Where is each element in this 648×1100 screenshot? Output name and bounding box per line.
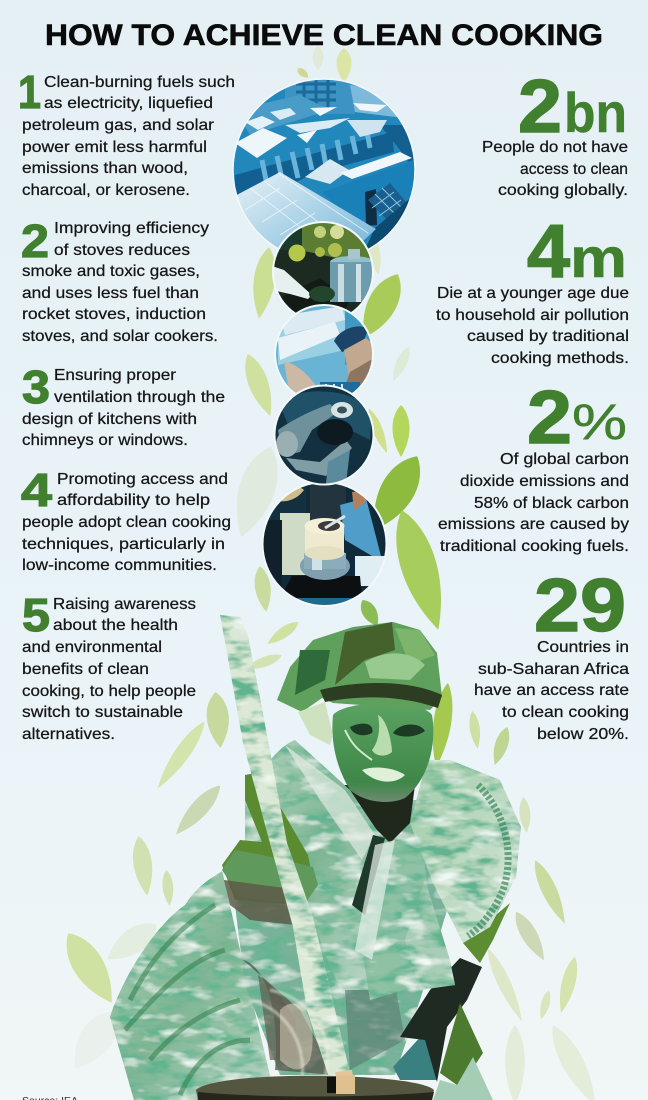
title: HOW TO ACHIEVE CLEAN COOKING	[45, 19, 603, 52]
woman: skirt and lap	[110, 800, 450, 1100]
step 3	[22, 361, 225, 449]
stat: 29: Countries in	[537, 639, 629, 656]
stat: 4m: caused by traditional	[467, 328, 629, 345]
stat: 29: have an access rate	[474, 682, 629, 699]
woman: wooden stirring stick	[220, 615, 354, 1093]
stat: 29	[474, 563, 629, 743]
step 4: people adopt clean cooking	[22, 514, 231, 531]
step 5: alternatives.	[22, 726, 115, 743]
step 1	[18, 66, 235, 199]
steps list	[18, 66, 235, 743]
step 3: ventilation through the	[54, 389, 225, 406]
step 4: 4	[21, 464, 52, 516]
step 2: stoves, and solar cookers.	[22, 328, 218, 345]
step 5: 5	[22, 589, 50, 641]
photo: cooks around a pot circle	[274, 384, 374, 486]
floating leaves: upper cluster	[224, 46, 455, 673]
step 1: petroleum gas, and solar	[22, 117, 215, 134]
stat: 4m: m	[570, 226, 627, 289]
step 1: as electricity, liquefied	[44, 95, 213, 112]
stat: 2%: %	[572, 394, 627, 450]
stat: 2%: dioxide emissions and	[460, 473, 629, 490]
step 5: and environmental	[22, 639, 162, 656]
stick foot	[335, 1070, 355, 1094]
stat: 29: 29	[534, 563, 626, 647]
step 5: Raising awareness	[53, 596, 196, 613]
photo: hand and pot circle	[272, 221, 374, 314]
stat: 4m: to household air pollution	[436, 307, 629, 324]
stat: 2bn: 2	[518, 64, 562, 148]
smoke	[250, 990, 328, 1090]
woman: embroidered cape	[405, 760, 521, 990]
stat: 4m	[436, 209, 629, 367]
step 2: and uses less fuel than	[22, 285, 199, 302]
woman: arm and hand	[222, 772, 318, 925]
step 4: affordability to help	[57, 492, 210, 509]
step 2: rocket stoves, induction	[22, 306, 206, 323]
woman: neck	[343, 785, 415, 843]
step 1: 1	[18, 66, 41, 118]
step 2: smoke and toxic gases,	[22, 263, 200, 280]
step 4: Promoting access and	[57, 471, 228, 488]
step 2: Improving efficiency	[54, 220, 209, 237]
stat: 2%: Of global carbon	[500, 451, 629, 468]
step 1: power emit less harmful	[22, 139, 207, 156]
stat: 2%: traditional cooking fuels.	[440, 538, 629, 555]
floating leaves: lower cluster	[55, 682, 605, 1100]
step 3: 3	[22, 361, 50, 413]
stat: 2bn: bn	[564, 81, 627, 144]
photo: induction stove and steamer circle	[260, 480, 390, 612]
stat: 2bn: People do not have	[482, 139, 628, 156]
woman: headwrap	[277, 622, 442, 745]
step 2: 2	[21, 215, 49, 267]
step 5	[22, 589, 196, 743]
cooking pot	[196, 1075, 434, 1100]
stat: 29: sub-Saharan Africa	[478, 661, 629, 678]
woman: right arm and drape	[400, 958, 493, 1100]
step 4: low-income communities.	[22, 557, 217, 574]
photo: man and extractor hood circle	[274, 304, 374, 394]
illustration: woman stirring a pot	[110, 615, 521, 1100]
step 5: switch to sustainable	[22, 704, 183, 721]
step 3: chimneys or windows.	[22, 432, 188, 449]
step 1: charcoal, or kerosene.	[22, 182, 190, 199]
woman: shirt and collar	[245, 740, 430, 1000]
step 5: cooking, to help people	[22, 683, 196, 700]
stat: 4m: cooking methods.	[491, 350, 629, 367]
key statistics	[436, 64, 629, 743]
stat: 2%	[438, 375, 629, 555]
stat: 2bn: cooking globally.	[498, 182, 628, 199]
step 4	[21, 464, 231, 574]
step 3: design of kitchens with	[22, 411, 197, 428]
step 5: benefits of clean	[22, 661, 149, 678]
step 5: about the health	[53, 617, 178, 634]
stat: 4m: 4	[527, 209, 570, 293]
stat: 29: below 20%.	[537, 726, 629, 743]
stat: 2%: 2	[527, 375, 572, 459]
stat: 4m: Die at a younger age due	[437, 285, 629, 302]
step 4: techniques, particularly in	[22, 536, 225, 553]
photo: solar rooftops circle	[232, 78, 416, 250]
stat: 2bn: access to clean	[520, 161, 628, 178]
stat: 29: to clean cooking	[502, 704, 629, 721]
stat: 2bn	[482, 64, 628, 199]
stat: 2%: emissions are caused by	[438, 516, 629, 533]
step 2	[21, 215, 218, 345]
step 1: Clean-burning fuels such	[44, 74, 235, 91]
step 1: emissions than wood,	[22, 160, 188, 177]
stat: 2%: 58% of black carbon	[474, 495, 629, 512]
step 2: of stoves reduces	[54, 242, 190, 259]
woman: face	[332, 703, 433, 802]
step 3: Ensuring proper	[54, 367, 177, 384]
